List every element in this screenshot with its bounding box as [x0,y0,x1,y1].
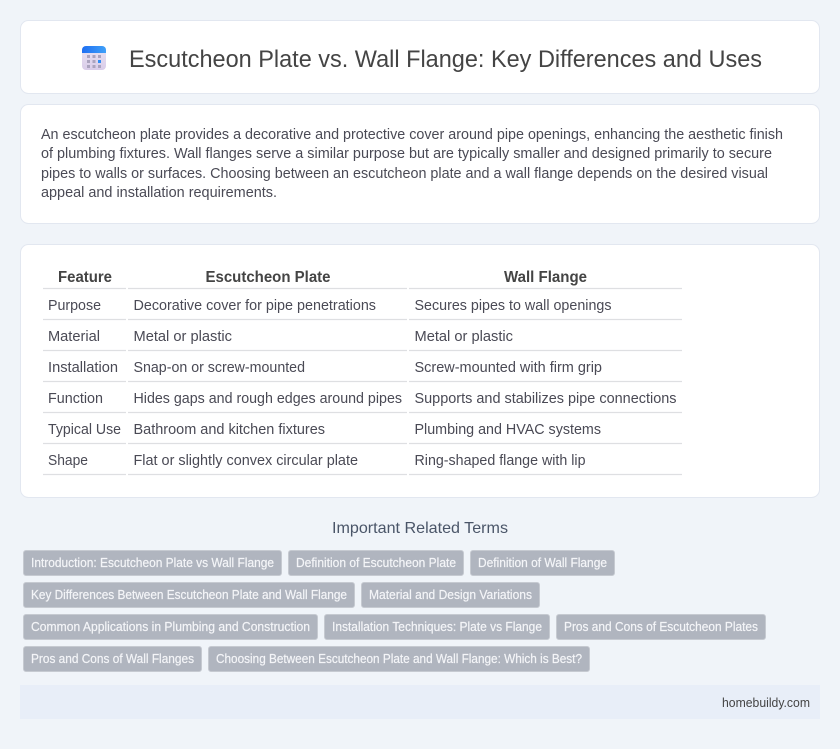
table row: shape [43,453,682,474]
table row: purpose: Secures pipes to wall openings [414,298,612,314]
table row: installation: Screw-mounted with firm grip [414,360,602,376]
table row: typical use: Plumbing and HVAC systems [414,422,601,438]
tag [24,646,202,672]
tag: Pros and Cons of Wall Flanges [31,652,194,666]
heading: important related terms: Important Related Terms [332,520,508,537]
tag [556,614,766,640]
table row: purpose: Decorative cover for pipe penetrations [134,298,376,314]
tag: Introduction: Escutcheon Plate vs Wall Flange [31,556,274,570]
tag: Definition of Wall Flange [478,556,607,570]
icon: calendar [82,46,106,70]
tag [208,646,590,672]
table row: material: Material [48,329,100,345]
tag: Installation Techniques: Plate vs Flange [332,620,542,634]
table row: typical use: Bathroom and kitchen fixtures [134,422,325,438]
panel: introduction paragraph: of plumbing fixtures. Wall flanges serve a similar purpose but are typically smaller and designed primarily to secure [41,146,772,162]
tag [24,550,282,576]
title: Escutcheon Plate vs. Wall Flange: Key Differences and Uses [129,46,762,73]
table row: shape: Shape [48,453,88,469]
table row: installation [43,360,682,382]
table row: purpose: Purpose [48,298,101,314]
panel: title card [20,20,820,94]
table header row: Feature [58,269,112,286]
table row: function: Supports and stabilizes pipe connections [414,391,676,407]
panel: introduction paragraph: appeal and installation requirements. [41,185,277,201]
table row: typical use: Typical Use [48,422,121,438]
table row: typical use [43,422,682,444]
tag: Common Applications in Plumbing and Construction [31,620,310,634]
panel: introduction paragraph: An escutcheon plate provides a decorative and protective cover around pipe openings, enhancing the aesthetic finish [41,127,783,143]
table row: installation: Snap-on or screw-mounted [134,360,305,376]
tag: Material and Design Variations [369,588,532,602]
table row: material [43,329,682,350]
panel: introduction paragraph: pipes to walls or surfaces. Choosing between an escutcheon plate and a wall flange depends on the desired visual [41,166,768,182]
panel: related term tags [24,550,766,672]
tag [470,550,614,576]
tag [24,614,318,640]
table row: material: Metal or plastic [414,329,513,345]
footer source text: homebuildy.com [722,695,810,710]
panel: introduction paragraph [20,104,820,224]
table row: installation: Installation [48,360,118,376]
table row: material: Metal or plastic [134,329,232,345]
tag [24,582,354,608]
table row: function: Hides gaps and rough edges around pipes [134,391,402,407]
tag [362,582,540,608]
tag [288,550,464,576]
table header row: Escutcheon Plate [206,269,331,286]
table header row [43,269,682,288]
tag: Pros and Cons of Escutcheon Plates [564,620,758,634]
table row: purpose [43,298,682,320]
table row: shape: Ring-shaped flange with lip [414,453,586,469]
tag [324,614,550,640]
table row: function: Function [48,391,103,407]
tag: Definition of Escutcheon Plate [296,556,456,570]
table header row: Wall Flange [504,269,587,286]
tag: Choosing Between Escutcheon Plate and Wall Flange: Which is Best? [216,652,582,666]
panel: comparison table [20,244,820,498]
tag: Key Differences Between Escutcheon Plate and Wall Flange [31,588,347,602]
footer [20,685,820,719]
table row: function [43,391,682,412]
table row: shape: Flat or slightly convex circular plate [134,453,358,469]
